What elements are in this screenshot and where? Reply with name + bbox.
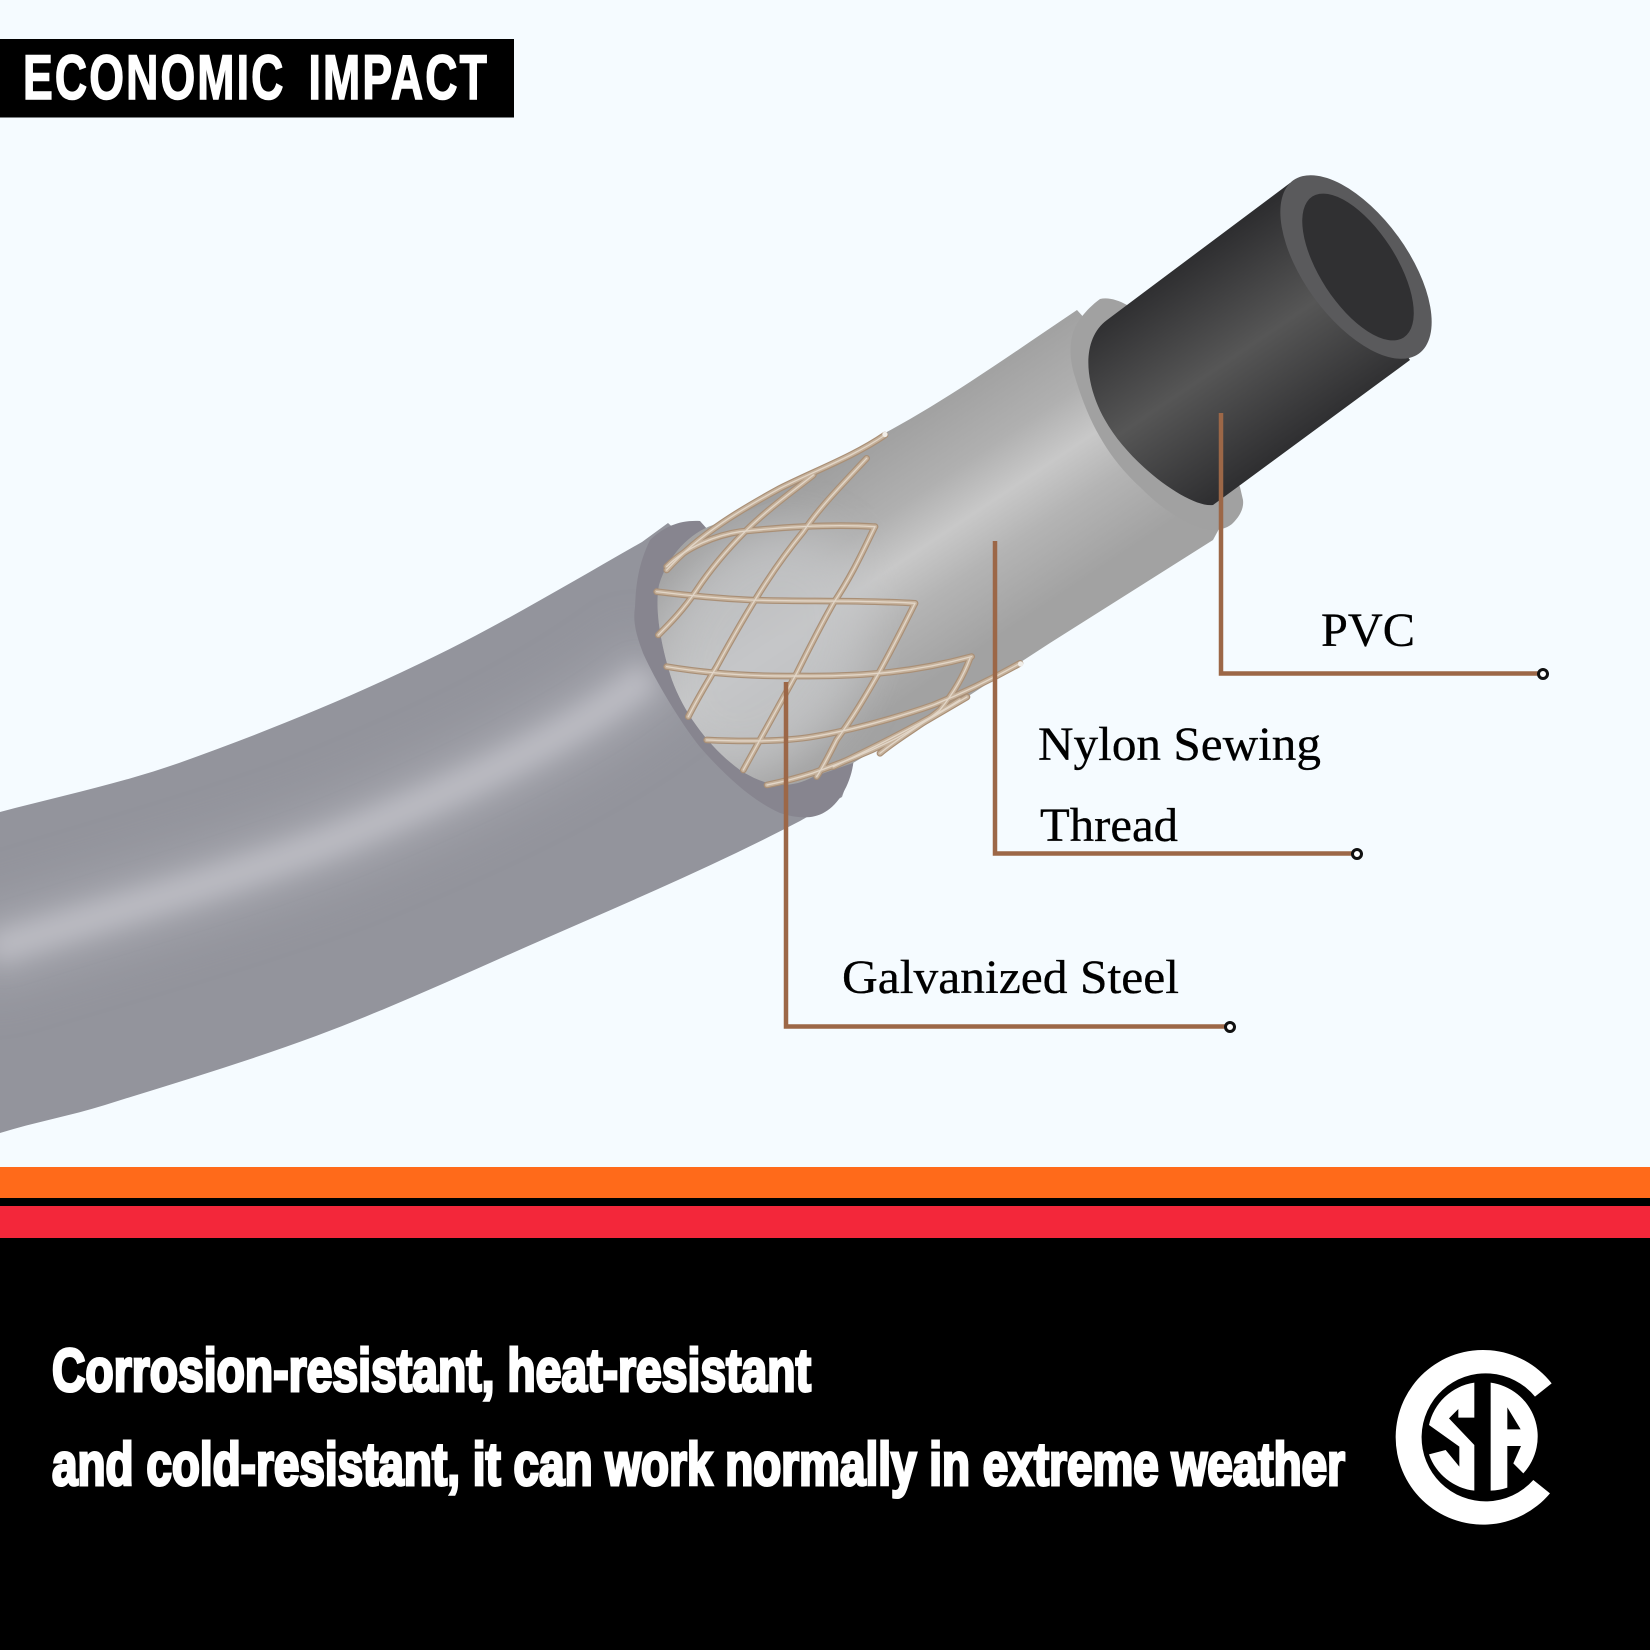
black PVC inner tube xyxy=(1088,150,1461,505)
footer panel xyxy=(0,1167,1650,1650)
icon: CSA certification mark xyxy=(1396,1350,1552,1525)
callout: galvanized steel: Galvanized Steel xyxy=(842,951,1179,1004)
middle layer collar xyxy=(1071,298,1243,530)
middle nylon layer and opening xyxy=(657,310,1240,785)
tube end rim xyxy=(1251,150,1461,384)
callout: nylon sewing thread: Thread xyxy=(1040,799,1178,852)
light inside opening xyxy=(658,514,866,780)
callout: galvanized steel xyxy=(786,682,1234,1032)
background xyxy=(0,0,1650,1167)
black panel xyxy=(0,1198,1650,1650)
red stripe xyxy=(0,1206,1650,1238)
callout: nylon sewing thread: Nylon Sewing xyxy=(1038,718,1321,771)
sheath cut collar xyxy=(634,521,860,817)
title badge: ECONOMIC IMPACT xyxy=(23,43,489,113)
outer grey sheath xyxy=(0,500,880,1150)
galvanized steel braid xyxy=(657,432,1023,785)
callout: PVC xyxy=(1221,413,1548,678)
footer text xyxy=(52,1337,1345,1498)
callout: PVC: PVC xyxy=(1321,604,1415,657)
tube bore xyxy=(1280,176,1436,358)
callout: nylon sewing thread xyxy=(995,541,1362,858)
footer text: Corrosion-resistant, heat-resistant xyxy=(52,1337,811,1404)
orange stripe xyxy=(0,1167,1650,1198)
hose illustration xyxy=(0,150,1461,1150)
title badge xyxy=(0,39,514,118)
